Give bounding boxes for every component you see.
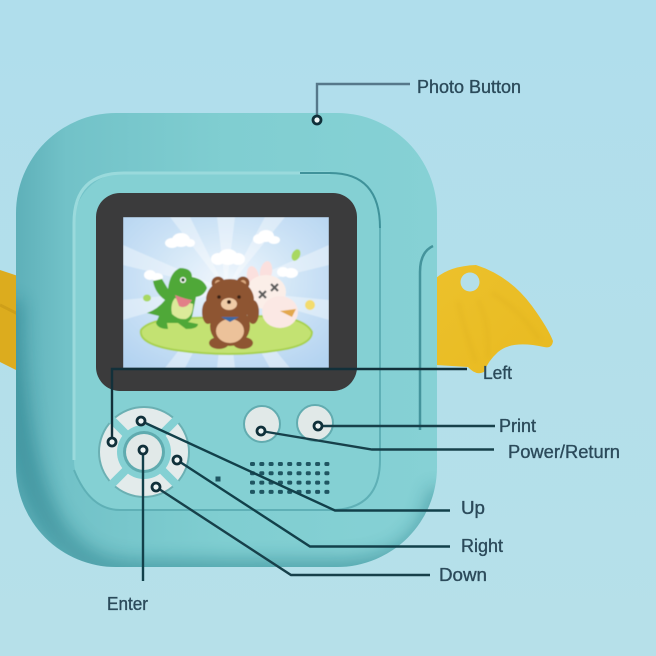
screen illustration (123, 217, 329, 368)
label: Print: Print (499, 416, 536, 436)
label: Left: Left (483, 363, 512, 383)
speaker grille (250, 462, 329, 494)
right side slot (420, 246, 433, 430)
sun rays (123, 217, 329, 368)
buttons: power and print (244, 405, 333, 442)
body edge shading (10, 300, 442, 572)
callout dots (108, 116, 322, 491)
grass island (141, 316, 312, 354)
camera body (10, 113, 442, 572)
icon: right yellow wing (436, 265, 553, 373)
bear (202, 276, 259, 349)
label: Up: Up (461, 498, 485, 518)
label: Enter: Enter (107, 594, 148, 614)
inner front panel (74, 173, 380, 510)
icon: left yellow wing (0, 270, 18, 371)
bunny (245, 260, 298, 328)
clouds (144, 230, 298, 281)
callout lines (112, 84, 495, 581)
leaves (291, 248, 301, 262)
d-pad controller (99, 407, 189, 497)
label: Power/Return: Power/Return (508, 442, 620, 462)
label: Photo Button: Photo Button (417, 77, 521, 97)
label: Right: Right (461, 536, 503, 556)
screen bezel (96, 193, 357, 391)
microphone hole (216, 476, 220, 482)
label: Down: Down (439, 565, 487, 585)
crocodile (147, 268, 207, 329)
